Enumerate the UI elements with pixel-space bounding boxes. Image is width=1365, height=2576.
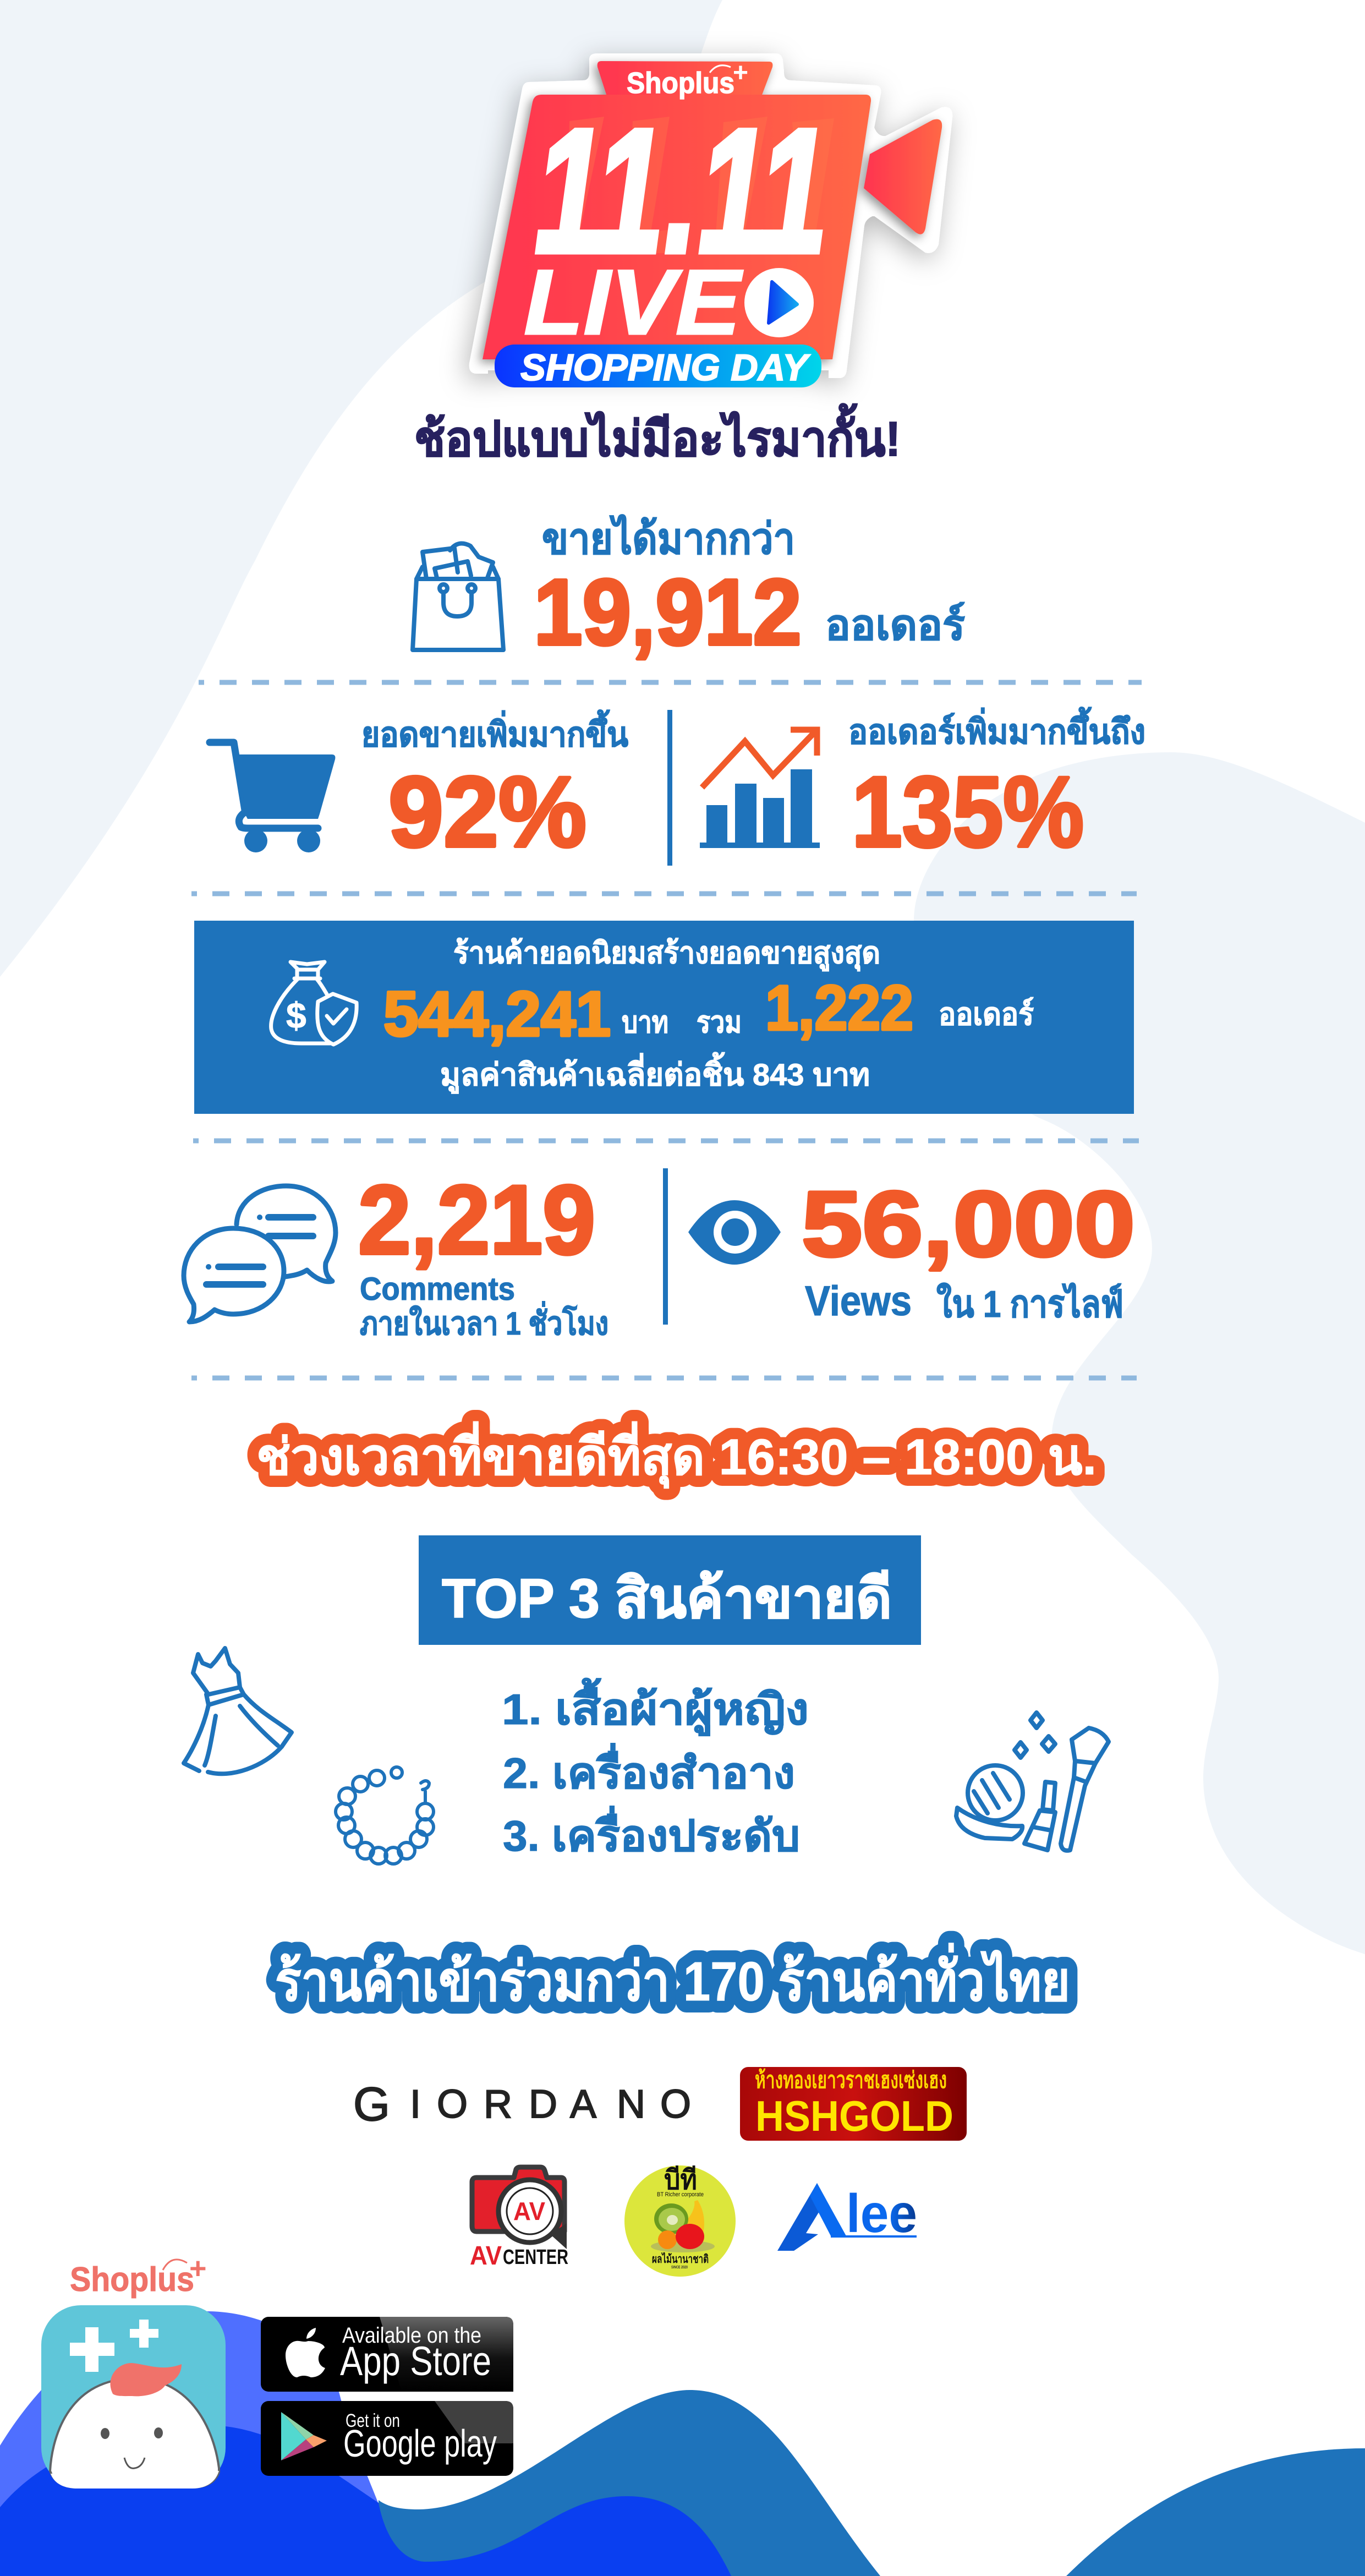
logo: AV Center: AV bbox=[513, 2197, 545, 2225]
logo: Shoplus wordmark pink: + bbox=[189, 2252, 207, 2285]
list item 1: 1. เสื้อผ้าผู้หญิง bbox=[502, 1678, 809, 1736]
stat: sold label: ขายได้มากกว่า bbox=[542, 514, 795, 563]
stat: 2,219: 2,219 bbox=[358, 1165, 595, 1275]
icon: bracelet bbox=[336, 1767, 434, 1864]
icon: growth chart bbox=[700, 730, 820, 848]
stat: 135%: 135% bbox=[852, 756, 1084, 868]
stat: 19,912: 19,912 bbox=[534, 560, 802, 665]
icon: chat bubbles bbox=[184, 1186, 336, 1322]
text: baht: บาท bbox=[622, 1006, 668, 1039]
stat: sales growth label: ยอดขายเพิ่มมากขึ้น bbox=[361, 709, 628, 754]
logo: digit shadows bbox=[567, 117, 834, 253]
icon: eye bbox=[688, 1200, 781, 1265]
logo: BT fruit: SINCE 2020 bbox=[671, 2266, 688, 2269]
icon: money bag with shield bbox=[271, 962, 357, 1044]
logo: Shoplus wordmark: + bbox=[733, 58, 748, 87]
logo: Shoplus wordmark: Shoplus bbox=[627, 67, 734, 100]
icon: dollar sign: $ bbox=[286, 995, 306, 1036]
background: pale blue shapes bbox=[0, 0, 1365, 1954]
logo: BT fruit bbox=[624, 2164, 736, 2277]
logo: HSH Gold: HSHGOLD bbox=[755, 2092, 953, 2140]
logo: BT fruit: BT Richer corporate bbox=[657, 2191, 704, 2198]
stat: 1,222: 1,222 bbox=[765, 973, 913, 1043]
logo: Giordano: G bbox=[353, 2078, 390, 2131]
tagline: ช้อปแบบไม่มีอะไรมากั้น! bbox=[414, 403, 901, 466]
badge: App Store bbox=[261, 2317, 513, 2392]
logo: LIVE: LIVE bbox=[524, 250, 743, 354]
character body bbox=[50, 2378, 219, 2487]
badge: App Store: Available on the bbox=[342, 2323, 481, 2348]
logo: AV Center: AV bbox=[470, 2241, 502, 2271]
play store icon bbox=[281, 2412, 327, 2460]
icon: dress bbox=[184, 1648, 292, 1774]
badge: Google Play: Google play bbox=[343, 2422, 497, 2465]
text: top shop heading: ร้านค้ายอดนิยมสร้างยอดขายสูงสุด bbox=[453, 937, 880, 972]
stat: order growth label: ออเดอร์เพิ่มมากขึ้นถึง bbox=[848, 707, 1145, 751]
text: orders: ออเดอร์ bbox=[939, 997, 1034, 1031]
logo: Alee bbox=[777, 2183, 917, 2251]
logo: HSH Gold bbox=[740, 2067, 967, 2141]
logo: Alee: lee bbox=[846, 2183, 917, 2244]
list: top 3 products bbox=[502, 1678, 809, 1860]
heading: top 3 box: TOP 3 สินค้าขายดี bbox=[442, 1568, 892, 1629]
logo: HSH Gold: ห้างทองเยาวราชเฮงเซ่งเฮง bbox=[755, 2067, 947, 2093]
background: bottom waves bbox=[0, 2311, 1365, 2576]
logo: camera body parts bbox=[483, 61, 942, 359]
icon: shopping cart bbox=[210, 742, 335, 852]
heading: best selling time: ช่วงเวลาที่ขายดีที่สุด 16:30 – 18:00 น. bbox=[256, 1421, 1097, 1489]
badge: App Store: App Store bbox=[340, 2338, 491, 2384]
heading: participating shops: ร้านค้าเข้าร่วมกว่า 170 ร้านค้าทั่วไทย bbox=[275, 1943, 1070, 2012]
stat: 92%: 92% bbox=[388, 756, 586, 868]
text: within one hour: ภายในเวลา 1 ชั่วโมง bbox=[360, 1301, 609, 1342]
face bbox=[101, 2428, 109, 2439]
logo: AV Center bbox=[470, 2167, 568, 2271]
logo: BT fruit: ผลไม้นานาชาติ bbox=[652, 2252, 709, 2266]
hair bbox=[110, 2363, 182, 2396]
divider: vertical bbox=[663, 1168, 668, 1325]
list item 2: 2. เครื่องสำอาง bbox=[503, 1743, 795, 1797]
text: total: รวม bbox=[697, 1006, 742, 1039]
badge: Google Play: Get it on bbox=[346, 2410, 400, 2431]
text: per live: ใน 1 การไลฟ์ bbox=[936, 1282, 1123, 1325]
logo: AV Center: CENTER bbox=[503, 2246, 568, 2269]
text: average price: มูลค่าสินค้าเฉลี่ยต่อชิ้น 843 บาท bbox=[440, 1052, 870, 1094]
panel: top shop bbox=[194, 921, 1134, 1114]
icon: Shoplus app bbox=[41, 2305, 226, 2489]
heading: top 3 box bbox=[419, 1535, 921, 1645]
logo: camera outline bbox=[470, 54, 952, 378]
text: comments: Comments bbox=[360, 1271, 515, 1307]
stat: 544,241: 544,241 bbox=[383, 979, 611, 1049]
icon: shopping bag bbox=[413, 544, 503, 650]
logo: Shoplus wordmark pink: Shoplus bbox=[70, 2261, 194, 2299]
icon: cosmetics bbox=[956, 1713, 1109, 1851]
logo: 11.11: 11.11 bbox=[535, 92, 827, 290]
logo: BT fruit: บีที bbox=[664, 2164, 697, 2195]
logo: brand tab bbox=[597, 61, 772, 96]
text: views: Views bbox=[805, 1278, 912, 1325]
logo: Giordano: IORDANO bbox=[410, 2082, 691, 2126]
stat: orders unit: ออเดอร์ bbox=[825, 602, 965, 649]
apple icon bbox=[286, 2328, 325, 2377]
heading: participating shops: ร้านค้าเข้าร่วมกว่า 170 ร้านค้าทั่วไทย bbox=[275, 1943, 1070, 2012]
plus signs bbox=[70, 2327, 114, 2372]
badge: Google Play bbox=[261, 2401, 513, 2476]
logo: 11.11 live shopping day camera bbox=[470, 54, 952, 389]
logo: Giordano bbox=[353, 2078, 691, 2131]
logo: camera body bbox=[483, 95, 871, 359]
logo: shopping day pill: SHOPPING DAY bbox=[520, 347, 811, 389]
logo: camera lens bbox=[864, 119, 942, 234]
stat: 56,000: 56,000 bbox=[802, 1172, 1135, 1276]
heading: best selling time: ช่วงเวลาที่ขายดีที่สุด 16:30 – 18:00 น. bbox=[256, 1421, 1097, 1489]
list item 3: 3. เครื่องประดับ bbox=[503, 1806, 800, 1860]
divider: vertical bbox=[667, 710, 672, 866]
logo: play button bbox=[744, 268, 814, 337]
